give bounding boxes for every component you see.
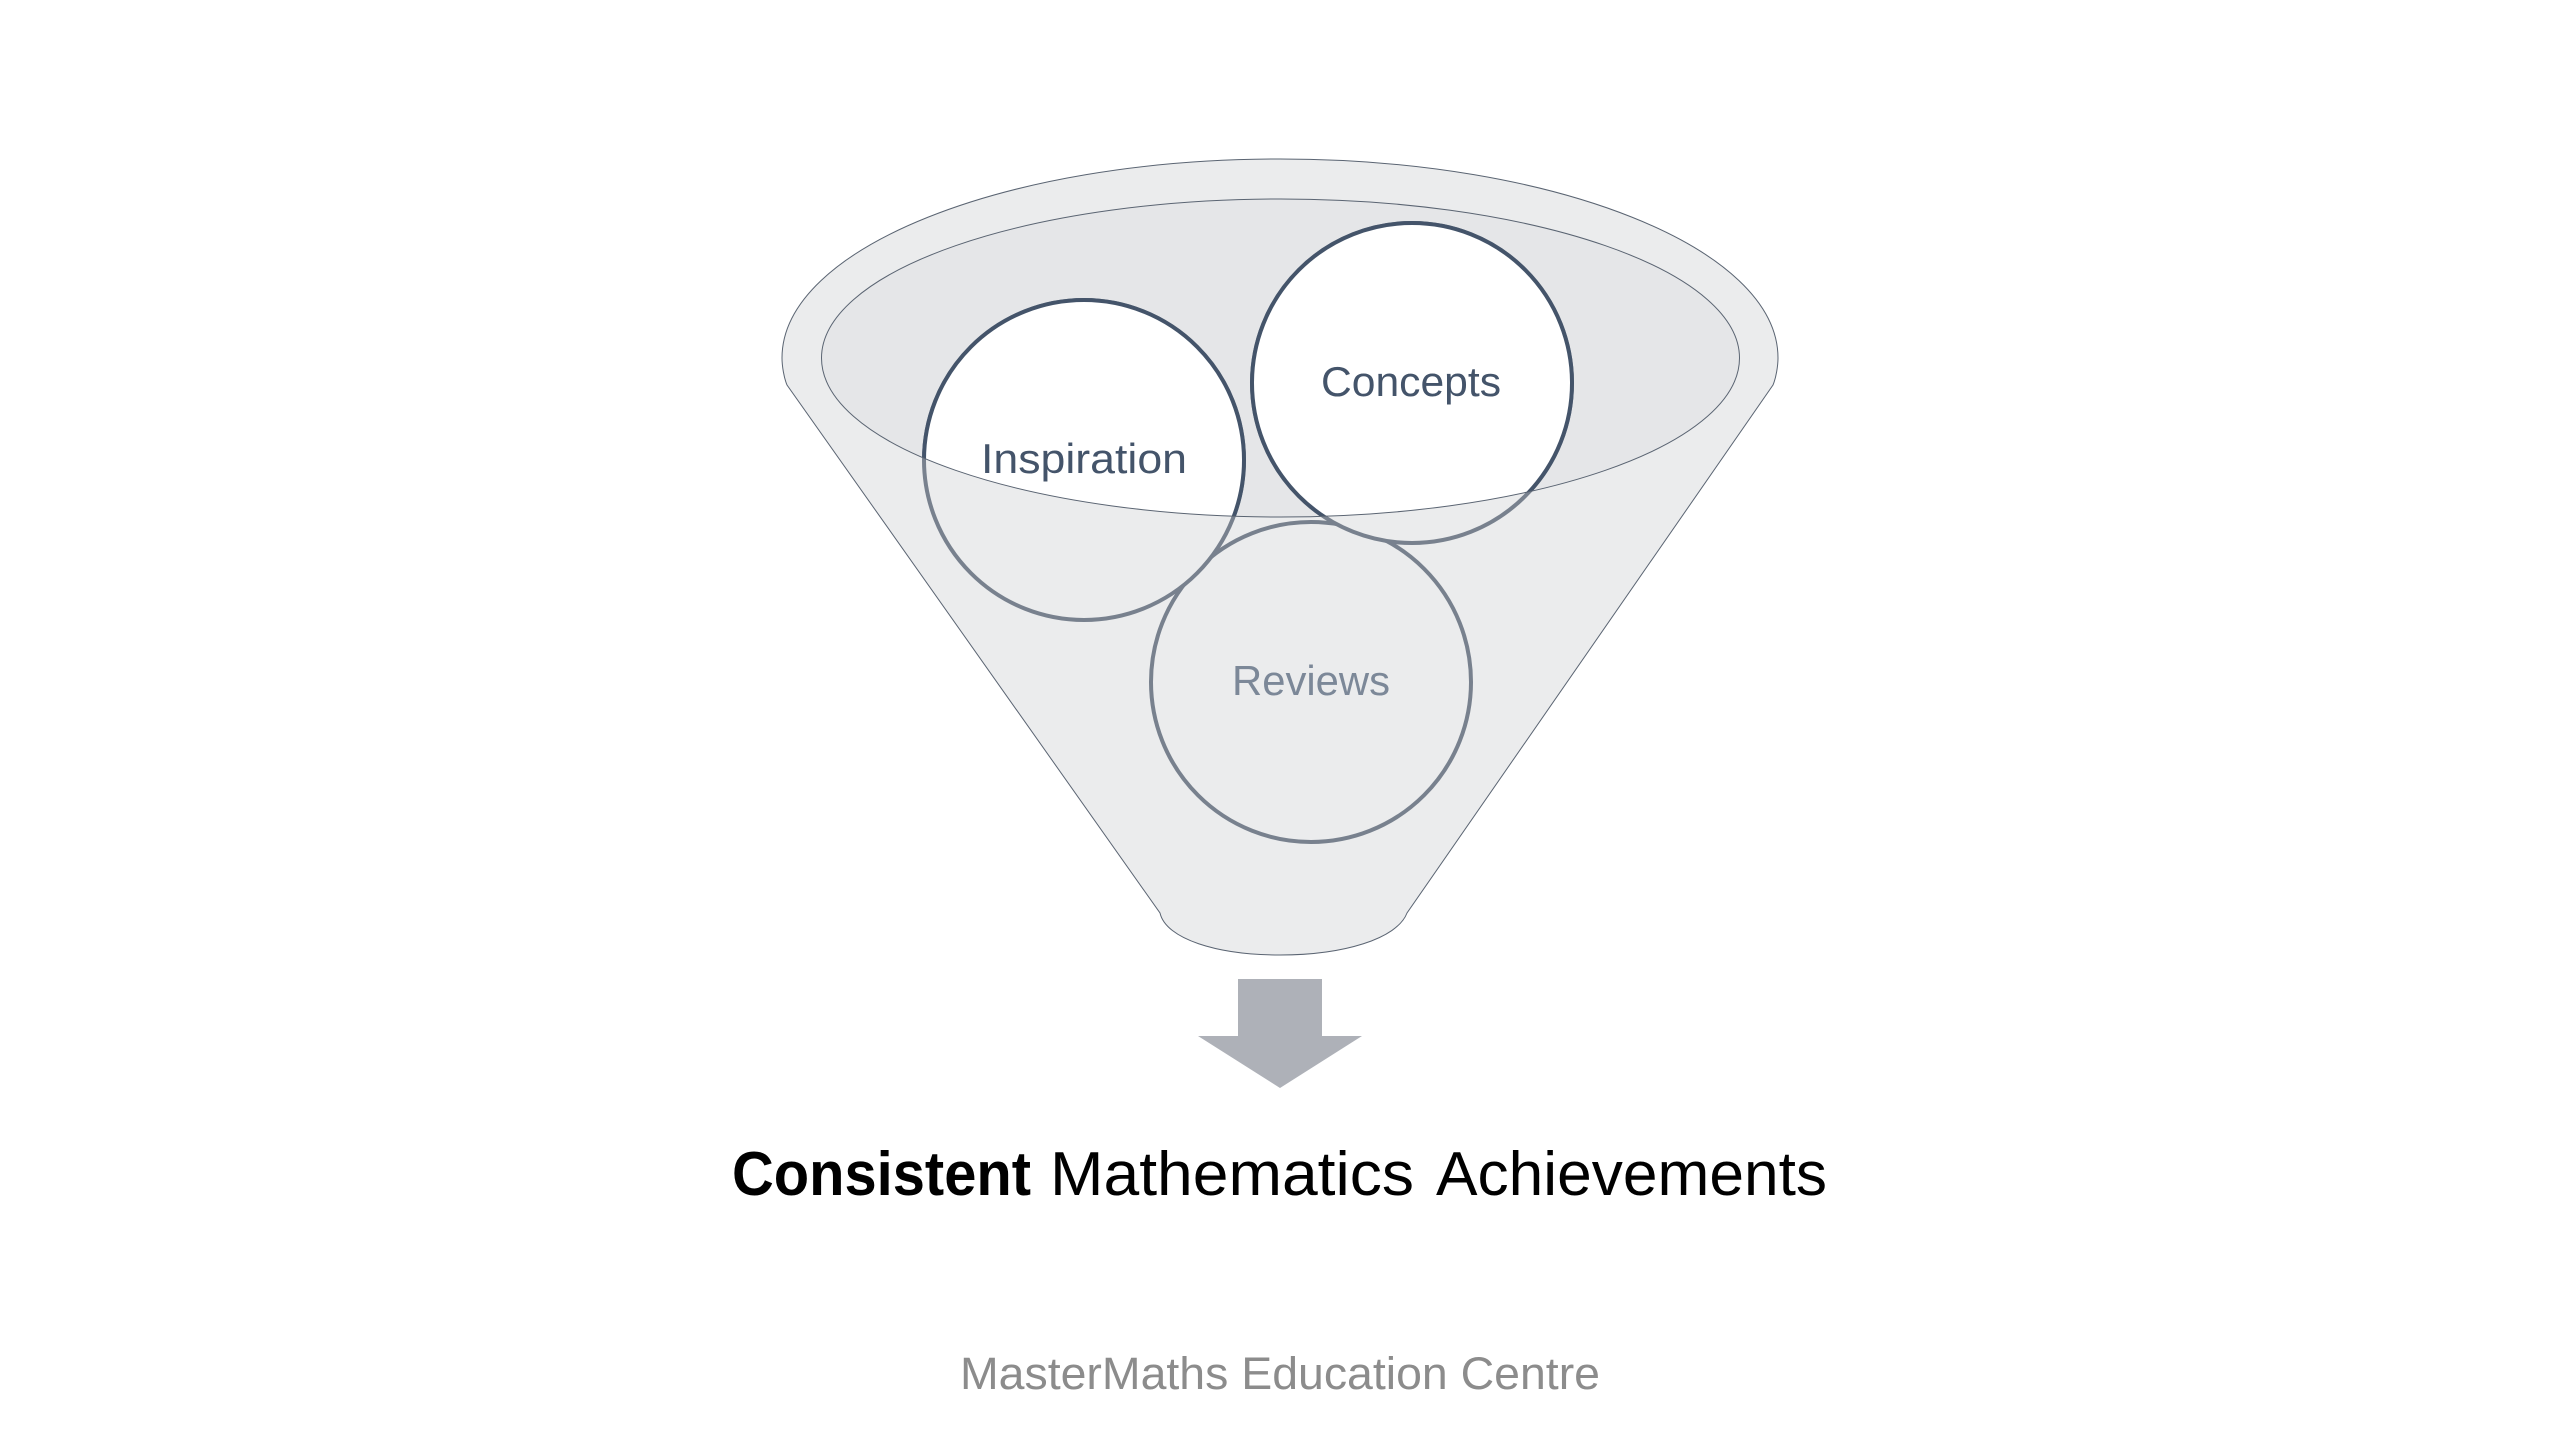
circle: Inspiration xyxy=(924,300,1244,620)
footer: MasterMaths Education Centre: MasterMaths Education Centre xyxy=(960,1348,1600,1399)
funnel diagram xyxy=(782,159,1778,955)
arrow: down xyxy=(1198,979,1362,1088)
funnel inner opening xyxy=(822,199,1740,517)
circle: Concepts xyxy=(1252,223,1572,543)
circle: Reviews: Reviews xyxy=(1232,657,1390,704)
heading: Consistent Mathematics Achievements: Mathematics xyxy=(1050,1140,1414,1209)
circle: Concepts: Concepts xyxy=(1321,358,1501,405)
circle: Reviews xyxy=(1151,522,1471,842)
heading: Consistent Mathematics Achievements xyxy=(732,1140,1827,1209)
circle: Inspiration: Inspiration xyxy=(981,435,1187,482)
funnel body xyxy=(782,159,1778,955)
heading: Consistent Mathematics Achievements: Achievements xyxy=(1436,1140,1827,1209)
funnel inner outline xyxy=(822,199,1740,517)
heading: Consistent Mathematics Achievements: Consistent xyxy=(732,1140,1031,1209)
